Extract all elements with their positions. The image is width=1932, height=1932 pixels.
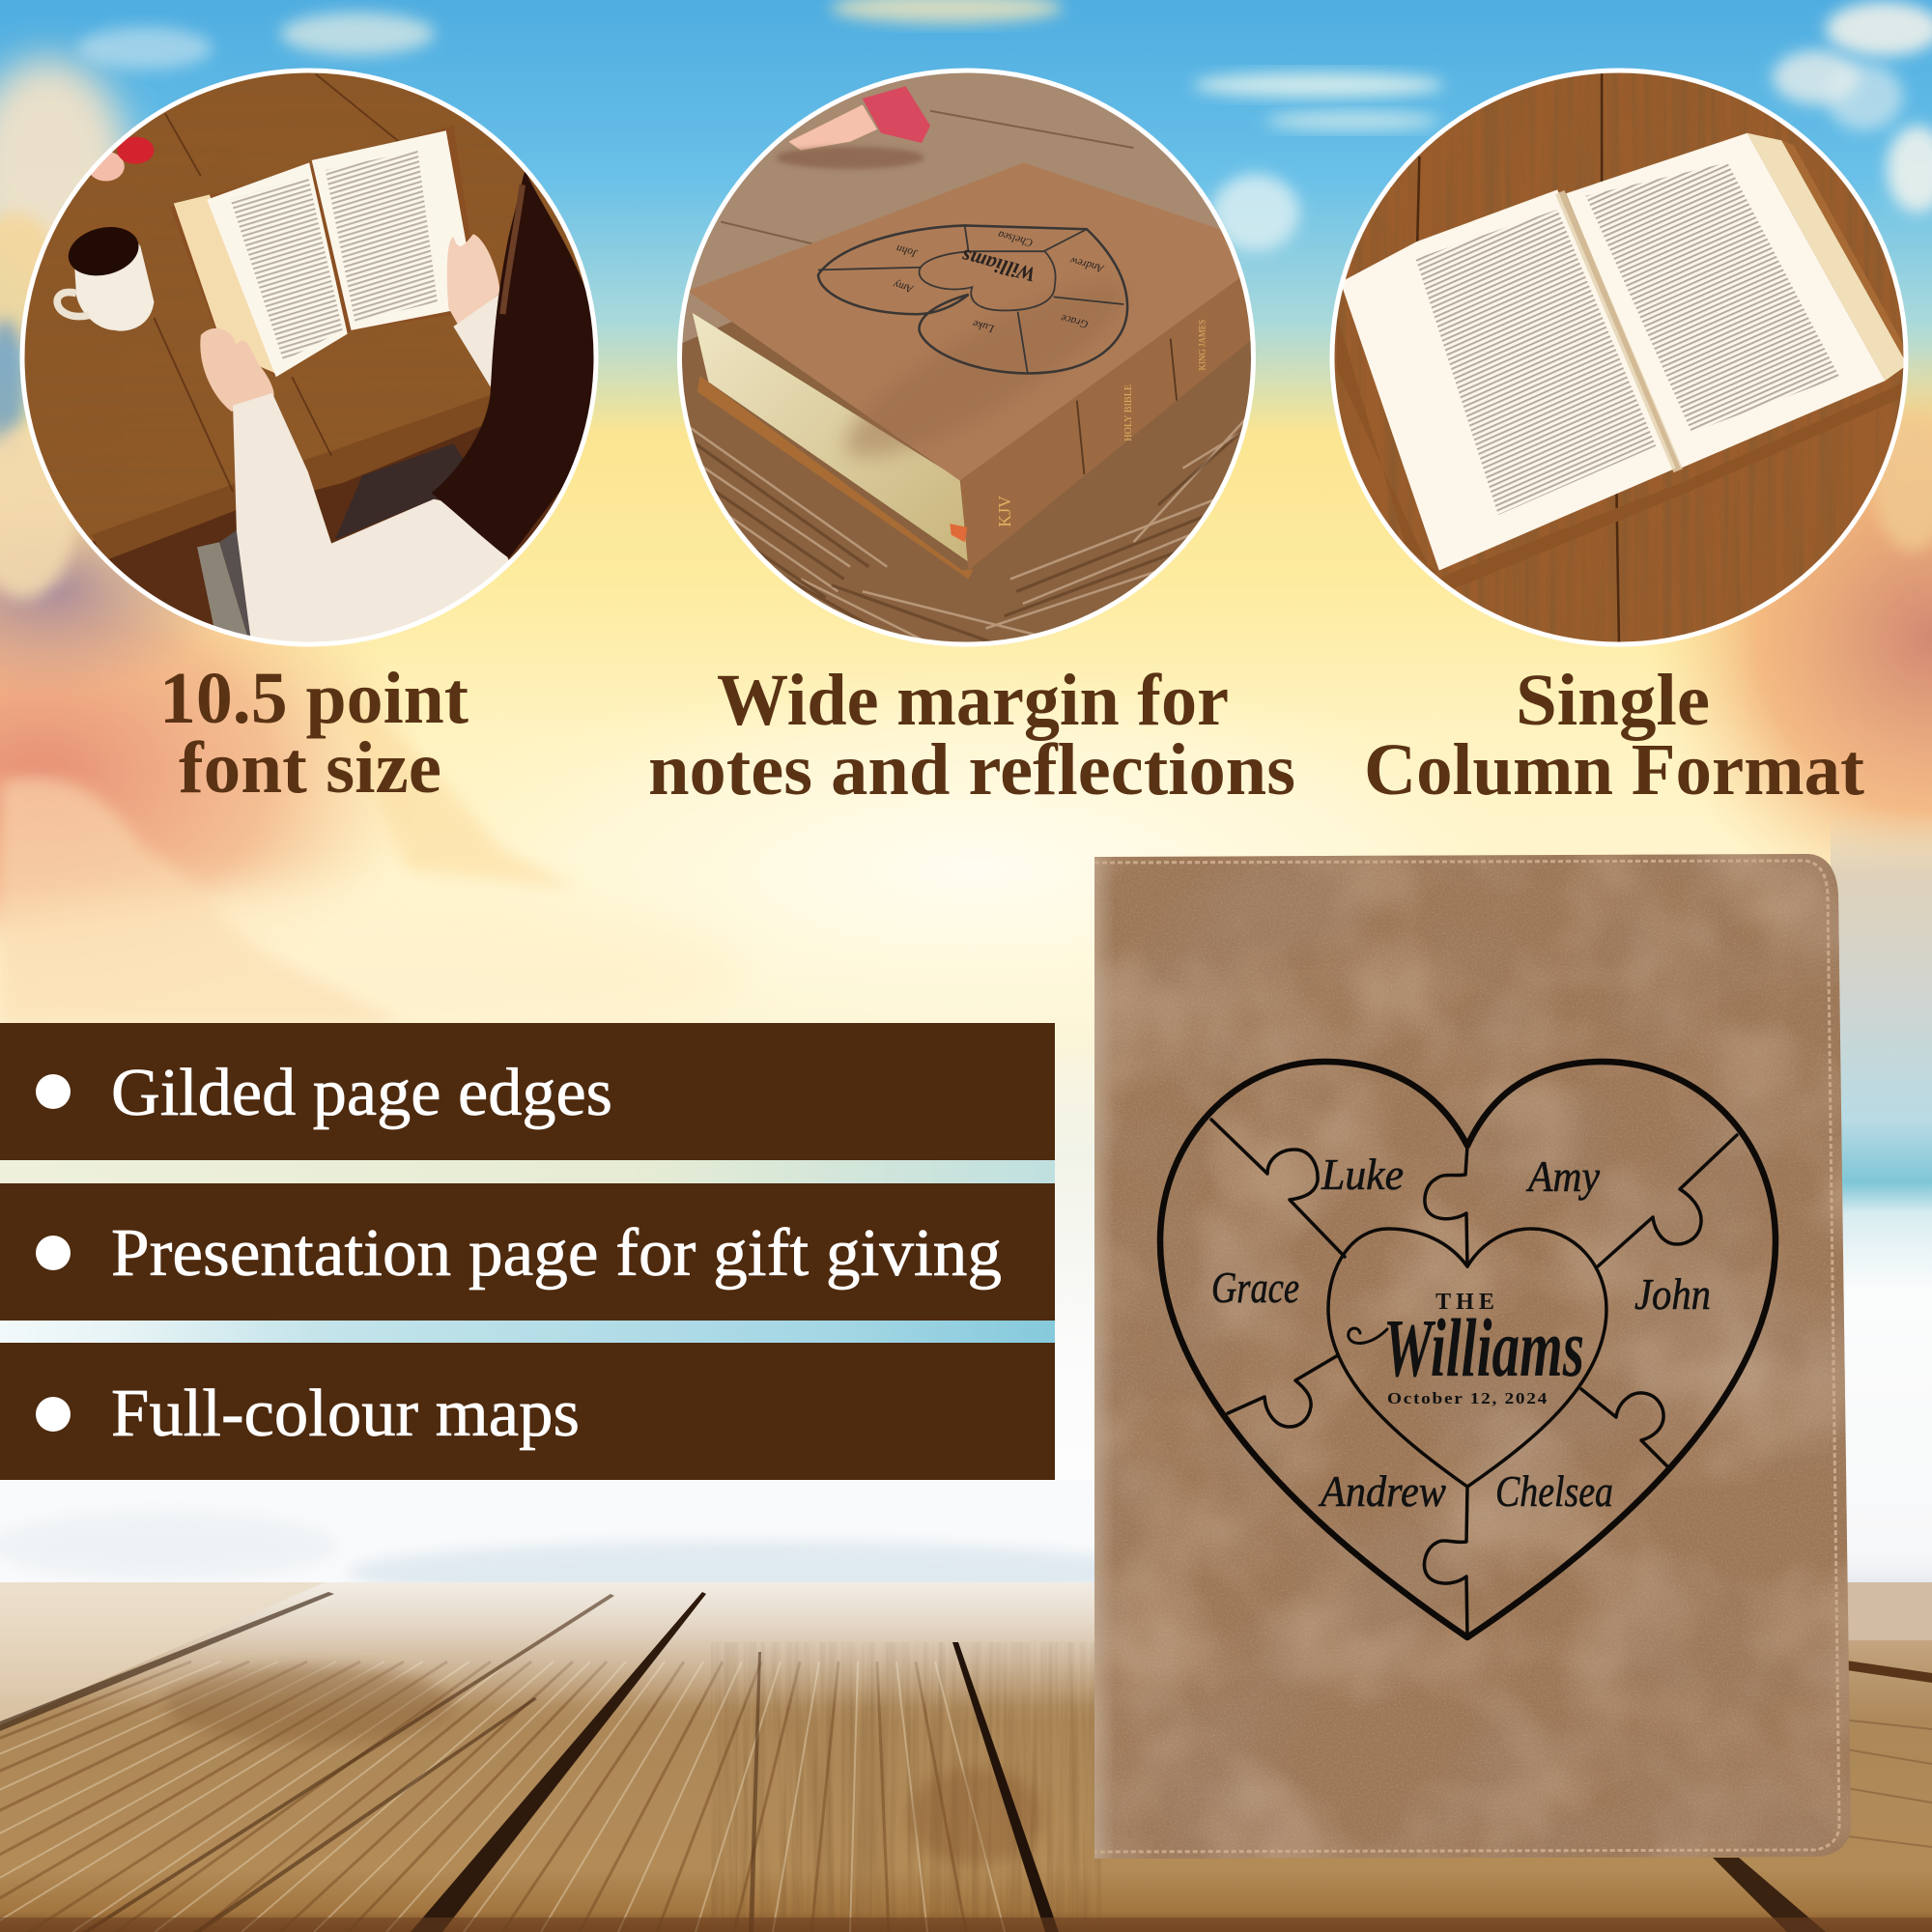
caption: 10.5 point font size: 10.5 point — [159, 658, 469, 739]
puzzle seams — [1211, 1120, 1737, 1637]
photo: closed bible on table: KING JAMES — [1197, 320, 1207, 370]
photo: closed bible on table: Andrew — [1068, 254, 1106, 274]
caption: wide margin: notes and reflections — [648, 729, 1295, 810]
photo circle: open bible — [1331, 68, 1922, 653]
caption: wide margin — [648, 660, 1295, 810]
names on puzzle pieces: John — [1634, 1269, 1711, 1319]
photo circle: leather bible — [678, 68, 1263, 653]
feature bar: gilded page edges: Gilded page edges — [111, 1056, 612, 1130]
family name: THE: THE — [1435, 1290, 1499, 1315]
feature bar: gilded page edges — [0, 1023, 1055, 1160]
photo: closed bible on table: Amy — [892, 278, 916, 295]
photo circle: reader at table — [18, 68, 604, 653]
feature bar: full-colour maps — [0, 1343, 1055, 1480]
names on puzzle pieces: Chelsea — [1495, 1466, 1613, 1516]
photo: open bible single column — [1331, 68, 1922, 653]
photo: closed bible on table: KJV — [995, 496, 1014, 527]
circle white rings — [22, 71, 1906, 644]
photo: reading woman — [18, 68, 604, 653]
photo: closed bible on table: Grace — [1060, 312, 1090, 330]
feature bar: presentation page — [0, 1183, 1055, 1321]
feature bar: full-colour maps: Full-colour maps — [111, 1377, 580, 1451]
photo: closed bible on table: Chelsea — [997, 228, 1035, 248]
names on puzzle pieces: Luke — [1321, 1150, 1404, 1199]
photo: closed bible on table: John — [895, 242, 919, 259]
names on puzzle pieces — [1211, 1150, 1711, 1516]
names on puzzle pieces: Andrew — [1318, 1466, 1446, 1516]
photo: closed bible on table: Williams — [959, 244, 1038, 287]
inner heart — [1328, 1229, 1606, 1487]
photo: closed bible on table — [678, 68, 1263, 653]
leather bible cover — [1092, 850, 1855, 1864]
puzzle heart engraving — [1160, 1062, 1776, 1637]
miniature heart engraving — [818, 225, 1127, 373]
caption: single column: Single — [1516, 660, 1710, 741]
caption: single column — [1364, 660, 1864, 810]
caption: 10.5 point font size — [159, 658, 469, 809]
date: October 12, 2024 — [1387, 1389, 1548, 1407]
family name: Williams: Williams — [1383, 1301, 1584, 1394]
wooden table — [0, 1582, 1932, 1932]
caption: wide margin: Wide margin for — [717, 660, 1229, 741]
feature bar: presentation page: Presentation page for gift giving — [111, 1216, 1002, 1291]
photo: closed bible on table: HOLY BIBLE — [1123, 384, 1134, 441]
caption: 10.5 point font size: font size — [179, 727, 441, 809]
photo: closed bible on table: Luke — [972, 318, 996, 334]
outer heart — [1160, 1062, 1776, 1637]
names on puzzle pieces: Grace — [1211, 1263, 1299, 1312]
caption: single column: Column Format — [1364, 729, 1864, 810]
names on puzzle pieces: Amy — [1525, 1151, 1601, 1201]
